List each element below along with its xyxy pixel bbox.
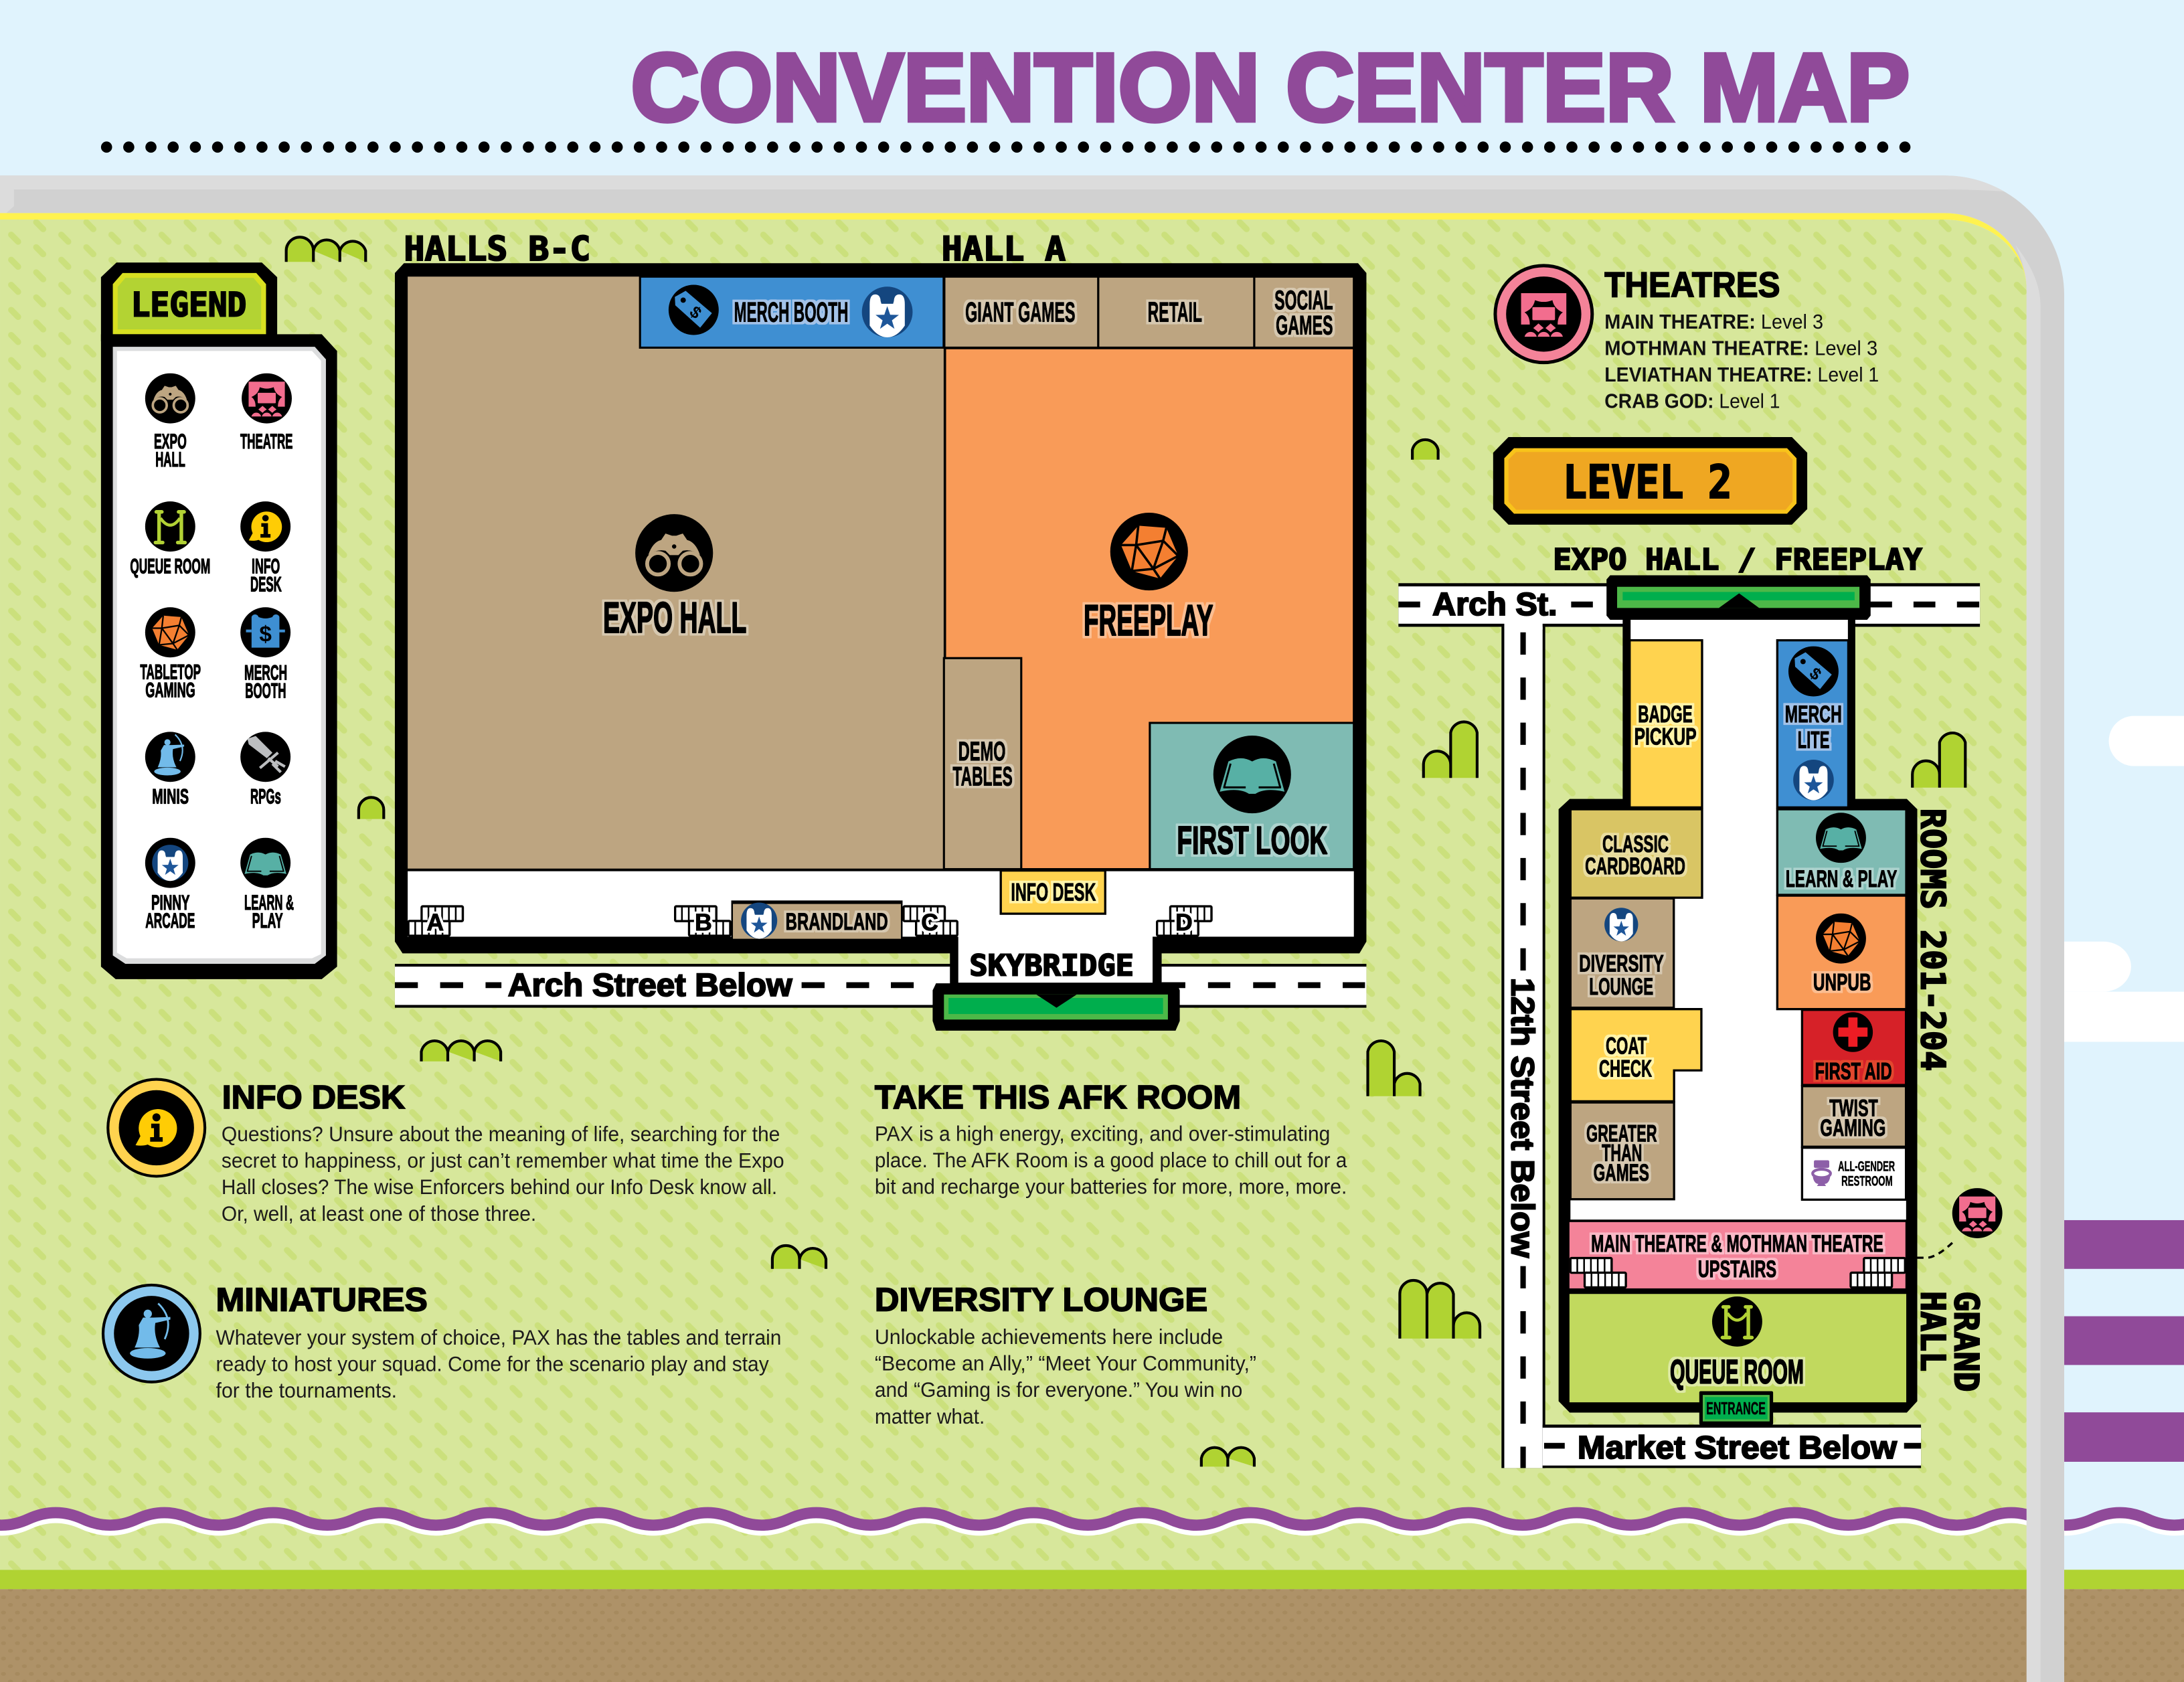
- room: merch lite: LITE: [1798, 727, 1829, 753]
- road: arch st: [1398, 583, 1980, 630]
- text block: diversity lounge: “Become an Ally,” “Meet Your Community,”: [875, 1352, 1256, 1375]
- badge: level 2: [1493, 437, 1807, 525]
- legend item: learn and play: [240, 838, 294, 932]
- legend item: rpgs: [240, 732, 290, 809]
- panel: legend: [101, 262, 337, 979]
- legend item: info desk: [240, 501, 290, 596]
- text block: diversity lounge: matter what.: [875, 1405, 985, 1428]
- legend panel box: [101, 334, 337, 979]
- text block: diversity lounge: [875, 1282, 1256, 1428]
- room: brandland: [732, 900, 902, 939]
- room: greater than games: THAN: [1602, 1140, 1642, 1166]
- room: greater than games: [1570, 1102, 1674, 1199]
- label: skybridge: SKYBRIDGE: [969, 949, 1134, 983]
- room: diversity lounge: LOUNGE: [1589, 974, 1653, 1000]
- room: diversity lounge: DIVERSITY: [1579, 950, 1664, 977]
- stairs: d: D: [1175, 910, 1193, 936]
- room: giant games: [944, 276, 1098, 347]
- room: social games: SOCIAL: [1274, 286, 1333, 315]
- room: coat check: COAT: [1606, 1033, 1647, 1060]
- outer walls: [1559, 613, 1917, 1413]
- text block: take this afk room: PAX is a high energy, exciting, and over-stimulating: [875, 1122, 1330, 1145]
- room: diversity lounge: [1570, 898, 1674, 1008]
- legend item: minis: [145, 732, 195, 809]
- text block: take this afk room: TAKE THIS AFK ROOM: [875, 1080, 1241, 1116]
- road: arch st: Arch St.: [1432, 587, 1558, 622]
- icon: miniatures: [102, 1284, 201, 1383]
- room: info desk: INFO DESK: [1011, 877, 1096, 906]
- room: freeplay: [945, 348, 1354, 869]
- room: learn and play: [1777, 809, 1906, 895]
- room: coat check: CHECK: [1599, 1056, 1652, 1082]
- text block: info desk: Questions? Unsure about the meaning of life, searching for the: [222, 1122, 780, 1146]
- heading: halls b-c: HALLS B-C: [404, 230, 590, 268]
- room: classic cardboard: [1570, 809, 1702, 898]
- icon: info desk: [106, 1078, 206, 1177]
- room: unpub: UNPUB: [1813, 970, 1871, 996]
- room: main theatre and mothman theatre: MAIN THEATRE & MOTHMAN THEATRE: [1591, 1231, 1883, 1257]
- clouds: [2064, 716, 2184, 1042]
- badge: level 2: LEVEL 2: [1563, 456, 1732, 509]
- room: giant games: GIANT GAMES: [965, 297, 1076, 328]
- legend tab: [101, 262, 277, 341]
- legend item: minis: MINIS: [152, 785, 189, 809]
- text block: miniatures: Whatever your system of choice, PAX has the tables and terrain: [216, 1326, 781, 1349]
- label: grand: GRAND: [1947, 1291, 1986, 1392]
- text block: theatres: [1493, 264, 1879, 413]
- room: merch booth: MERCH BOOTH: [734, 297, 848, 328]
- legend item: theatre: THEATRE: [240, 430, 292, 453]
- room: first aid: [1802, 1010, 1906, 1085]
- room: social games: GAMES: [1276, 311, 1333, 340]
- legend item: merch booth: [240, 607, 290, 703]
- text block: theatres: MAIN THEATRE: Level 3: [1604, 311, 1823, 333]
- skybridge entrance: [932, 936, 1180, 1031]
- room: learn and play: LEARN & PLAY: [1786, 866, 1898, 892]
- top entrance: [1606, 575, 1871, 620]
- legend tab: LEGEND: [131, 285, 246, 324]
- purple stripes: [2064, 1220, 2184, 1462]
- room: main theatre and mothman theatre: [1570, 1220, 1906, 1292]
- room: demo tables: TABLES: [952, 762, 1013, 792]
- text block: info desk: [106, 1078, 784, 1226]
- legend item: learn and play: PLAY: [252, 909, 283, 932]
- road: arch street below: Arch Street Below: [508, 968, 792, 1003]
- legend item: tabletop gaming: [140, 607, 201, 702]
- room: greater than games: GAMES: [1594, 1160, 1649, 1186]
- interior corridors: [1630, 618, 1848, 813]
- text block: info desk: Hall closes? The wise Enforcers behind our Info Desk know all.: [222, 1175, 777, 1199]
- icon: grand hall theatre: [1952, 1188, 2003, 1238]
- room: all-gender restroom: RESTROOM: [1841, 1173, 1893, 1189]
- text block: info desk: INFO DESK: [222, 1080, 405, 1116]
- text block: theatres: MOTHMAN THEATRE: Level 3: [1604, 338, 1877, 360]
- text block: theatres: THEATRES: [1604, 265, 1780, 305]
- legend item: expo hall: [145, 373, 195, 471]
- grass floor: [0, 220, 2027, 1570]
- legend item: pinny arcade: [145, 838, 195, 932]
- room: merch lite: MERCH: [1785, 701, 1842, 728]
- room: social games: [1254, 276, 1354, 347]
- stairs: b: [675, 906, 730, 936]
- stairs: c: [904, 906, 957, 936]
- text block: miniatures: for the tournaments.: [216, 1379, 397, 1402]
- room: main theatre and mothman theatre: UPSTAIRS: [1698, 1256, 1776, 1282]
- ground: [0, 1570, 2184, 1682]
- text block: miniatures: [102, 1282, 781, 1402]
- room: twist gaming: GAMING: [1820, 1115, 1885, 1141]
- legend item: rpgs: RPGs: [250, 785, 281, 809]
- room: twist gaming: [1802, 1086, 1906, 1147]
- room: unpub: [1777, 896, 1906, 1009]
- room: info desk: [1001, 871, 1105, 914]
- text block: info desk: Or, well, at least one of those three.: [222, 1202, 536, 1226]
- stairs: c: C: [921, 910, 938, 936]
- text block: info desk: secret to happiness, or just can’t remember what time the Expo: [222, 1149, 784, 1173]
- map: level 2 building: [1559, 575, 1917, 1425]
- title: CONVENTION CENTER MAP: [631, 34, 1910, 141]
- room: demo tables: DEMO: [958, 737, 1005, 766]
- room: freeplay: FREEPLAY: [1084, 596, 1213, 645]
- legend item: merch booth: BOOTH: [245, 679, 286, 703]
- map: level 1 halls: [395, 263, 1366, 1031]
- road: 12th street below: [1501, 624, 1545, 1468]
- room: retail: [1098, 276, 1254, 347]
- icon: toilet: [1813, 1160, 1831, 1186]
- room: twist gaming: TWIST: [1829, 1095, 1878, 1121]
- room: brandland: BRANDLAND: [786, 909, 888, 935]
- text block: diversity lounge: DIVERSITY LOUNGE: [875, 1282, 1207, 1319]
- text block: theatres: LEVIATHAN THEATRE: Level 1: [1604, 364, 1879, 386]
- legend item: merch booth: MERCH: [244, 661, 287, 685]
- heading: hall a: HALL A: [942, 230, 1066, 268]
- road: market street below: [1543, 1424, 1921, 1468]
- legend item: queue room: QUEUE ROOM: [130, 555, 210, 578]
- room: demo tables: [944, 658, 1021, 869]
- stairs: d: [1157, 906, 1211, 936]
- road: 12th street below: 12th Street Below: [1505, 978, 1540, 1258]
- room: merch lite: [1777, 641, 1848, 807]
- text block: take this afk room: place. The AFK Room is a good place to chill out for a: [875, 1149, 1347, 1172]
- label: hall: HALL: [1914, 1291, 1952, 1371]
- room: queue room: [1570, 1294, 1906, 1402]
- bushes: [286, 237, 1965, 1466]
- road: arch street below: [395, 964, 1366, 1008]
- text block: miniatures: MINIATURES: [216, 1282, 428, 1319]
- label: expo hall / freeplay: EXPO HALL / FREEPLAY: [1553, 543, 1922, 577]
- room: first aid: FIRST AID: [1815, 1058, 1892, 1084]
- legend item: expo hall: HALL: [155, 448, 185, 471]
- dotted connector: [1917, 1240, 1956, 1258]
- text block: miniatures: ready to host your squad. Come for the scenario play and stay: [216, 1353, 769, 1376]
- room: coat check: [1570, 1009, 1701, 1101]
- room: all-gender restroom: [1802, 1148, 1906, 1199]
- room: classic cardboard: CARDBOARD: [1585, 853, 1685, 879]
- room: badge pickup: PICKUP: [1634, 724, 1697, 750]
- room: first look: [1150, 723, 1354, 869]
- room: classic cardboard: CLASSIC: [1602, 831, 1669, 857]
- stairs: a: A: [427, 910, 444, 936]
- legend item: learn and play: LEARN &: [244, 891, 294, 914]
- legend item: info desk: INFO: [252, 555, 280, 578]
- room: expo hall: EXPO HALL: [603, 594, 746, 642]
- legend item: expo hall: EXPO: [154, 430, 187, 453]
- text block: take this afk room: bit and recharge your batteries for more, more, more.: [875, 1175, 1347, 1198]
- legend item: pinny arcade: ARCADE: [145, 909, 195, 932]
- room: greater than games: GREATER: [1586, 1121, 1657, 1147]
- entrance: [1699, 1391, 1773, 1425]
- legend item: tabletop gaming: GAMING: [145, 679, 195, 702]
- text block: diversity lounge: Unlockable achievements here include: [875, 1325, 1223, 1349]
- dotted title rule: [106, 145, 1906, 150]
- text block: take this afk room: [875, 1080, 1347, 1198]
- room: all-gender restroom: ALL-GENDER: [1838, 1159, 1895, 1174]
- legend item: info desk: DESK: [250, 572, 282, 596]
- icon: theatres: [1493, 264, 1594, 364]
- stairs: a: [408, 906, 463, 936]
- label: rooms 201-204: ROOMS 201-204: [1914, 809, 1952, 1071]
- room: queue room: QUEUE ROOM: [1670, 1353, 1804, 1390]
- corridor: [408, 871, 1354, 936]
- room: merch booth: [640, 276, 944, 347]
- legend item: queue room: [130, 501, 210, 578]
- legend item: theatre: [240, 373, 292, 453]
- room: badge pickup: [1630, 641, 1702, 807]
- legend item: pinny arcade: PINNY: [151, 891, 190, 914]
- text block: diversity lounge: and “Gaming is for everyone.” You win no: [875, 1378, 1242, 1402]
- room: badge pickup: BADGE: [1638, 701, 1693, 728]
- room: first look: FIRST LOOK: [1177, 819, 1327, 863]
- room: expo hall: [408, 276, 944, 869]
- wavy line: [0, 1513, 2184, 1530]
- road: market street below: Market Street Below: [1578, 1430, 1898, 1466]
- room: retail: RETAIL: [1148, 297, 1202, 328]
- text block: theatres: CRAB GOD: Level 1: [1604, 391, 1780, 413]
- stairs: b: B: [695, 910, 712, 936]
- entrance: ENTRANCE: [1706, 1398, 1766, 1418]
- legend item: tabletop gaming: TABLETOP: [140, 661, 201, 684]
- outer walls: [395, 263, 1366, 953]
